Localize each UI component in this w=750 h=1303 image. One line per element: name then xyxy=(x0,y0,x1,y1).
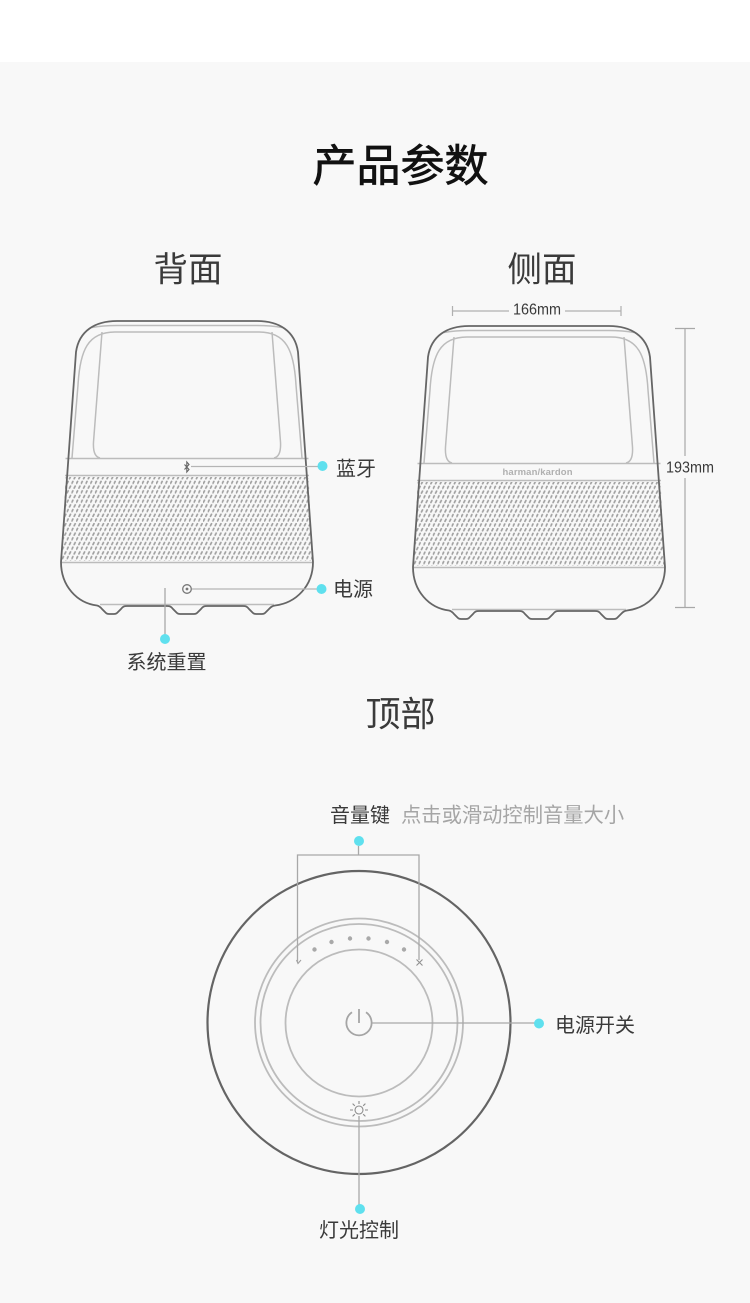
icon: bluetooth xyxy=(184,462,189,472)
icon: volume down xyxy=(296,960,301,964)
top view illustration xyxy=(208,871,510,1174)
heading: top view: 顶部 xyxy=(365,696,436,734)
dimension: height 193mm xyxy=(666,328,714,608)
callout: bluetooth: 蓝牙 xyxy=(336,458,376,480)
callout: power: 电源 xyxy=(333,578,373,601)
title: 产品参数 xyxy=(312,142,488,191)
brand label: harman/kardon: harman/kardon xyxy=(502,467,573,478)
callout: light control xyxy=(319,1116,399,1242)
dimension: height 193mm: 193mm xyxy=(666,460,714,476)
heading: side view: 侧面 xyxy=(508,252,576,290)
callout: light control: 灯光控制 xyxy=(319,1219,399,1242)
callout: power switch: 电源开关 xyxy=(555,1014,635,1037)
dimension: width 166mm xyxy=(452,302,621,318)
icon: power port xyxy=(183,585,191,593)
side speaker illustration xyxy=(413,326,665,619)
heading: back view: 背面 xyxy=(154,252,222,290)
dimension: width 166mm: 166mm xyxy=(513,302,561,318)
outer outline xyxy=(413,326,665,619)
outer circle xyxy=(208,871,510,1174)
callout: volume bracket xyxy=(298,836,419,962)
icon: light control sun xyxy=(350,1101,368,1119)
icon: power button xyxy=(346,1009,372,1035)
centre button xyxy=(286,950,432,1096)
callout: system reset: 系统重置 xyxy=(126,651,206,674)
upper panel lines xyxy=(61,326,313,604)
callout: system reset xyxy=(126,588,206,674)
icon: volume up xyxy=(416,960,422,966)
speaker grille xyxy=(413,481,665,567)
label: volume keys: 点击或滑动控制音量大小 xyxy=(401,804,624,827)
callout: bluetooth xyxy=(191,458,376,480)
upper panel lines xyxy=(413,330,665,610)
outer outline xyxy=(61,321,313,614)
back speaker illustration xyxy=(61,321,313,614)
speaker grille xyxy=(61,476,313,562)
volume indicator dots xyxy=(312,936,406,952)
label: volume keys: 音量键 xyxy=(330,804,390,827)
callout: power xyxy=(192,578,373,601)
control ring xyxy=(255,918,463,1126)
callout: power switch xyxy=(372,1014,635,1037)
